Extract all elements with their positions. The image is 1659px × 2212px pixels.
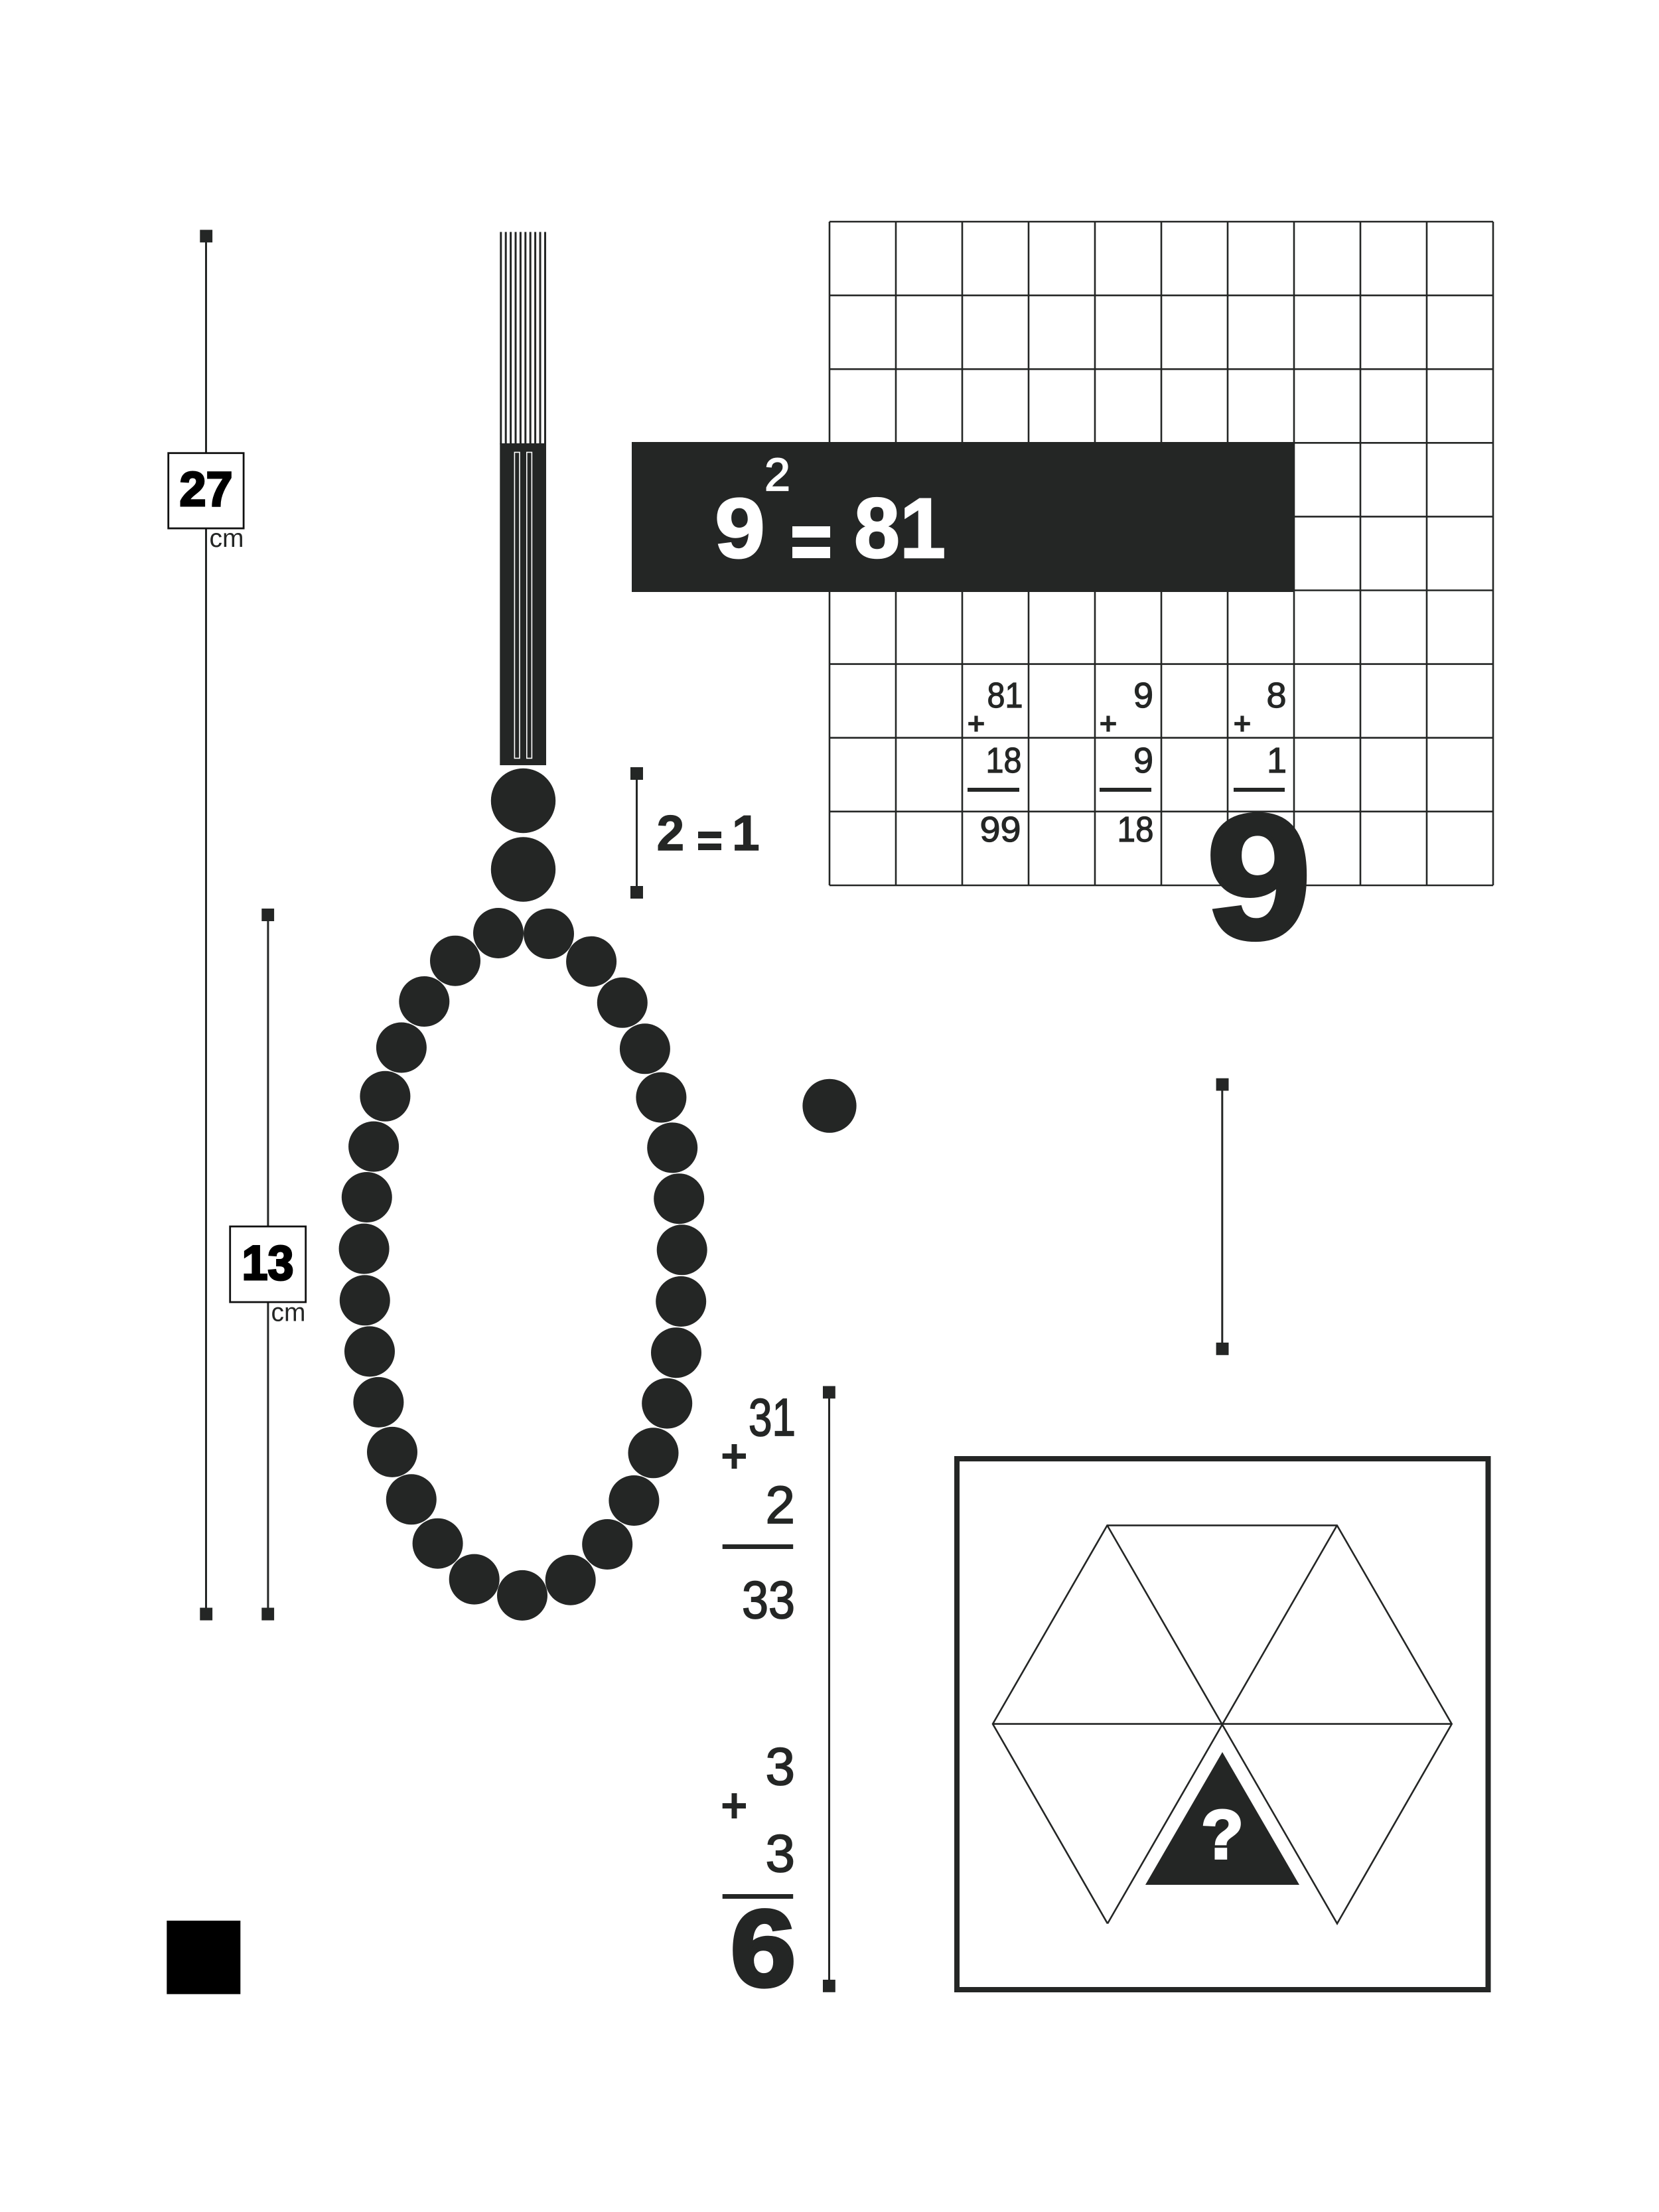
grid: [830, 222, 1493, 885]
sum: 31 + 2 = 33: 31: [749, 1388, 796, 1447]
sum: 9 + 9 = 18: [1099, 676, 1153, 849]
label box: 13: [230, 1226, 306, 1302]
tassel body: [500, 443, 546, 765]
label box: 27: [169, 453, 244, 528]
sum: 31 + 2 = 33: [723, 1388, 796, 1629]
large result: 6: 6: [731, 1887, 796, 2009]
sum: 8 + 1 = 9: +: [1233, 705, 1252, 741]
sum: 81 + 18 = 99: 81: [987, 676, 1023, 715]
sum: 81 + 18 = 99: 99: [979, 810, 1021, 849]
text: 2 = 1: [657, 805, 760, 861]
dark triangle with question mark: [1145, 1752, 1299, 1885]
sum: 81 + 18 = 99: +: [967, 705, 985, 741]
measure line: 13 cm: [230, 909, 306, 1621]
label box: 27: 27: [179, 463, 232, 516]
text: 2 = 1: 2: [657, 805, 684, 861]
equation banner: 9 squared = 81: [632, 442, 1294, 592]
framed hexagon puzzle: [957, 1459, 1488, 1990]
equation banner: 9 squared = 81: 81: [854, 481, 946, 576]
sum: 81 + 18 = 99: [967, 676, 1023, 849]
sum: 9 + 9 = 18: 9: [1133, 741, 1153, 780]
hexagon of triangles: [993, 1525, 1452, 1923]
sum: 8 + 1 = 9: [1206, 676, 1311, 976]
equation banner: 9 squared = 81: 2: [764, 449, 790, 500]
two large beads: [491, 769, 555, 902]
label box: 13: 13: [242, 1236, 293, 1290]
sum: 3 + 3 = 6: 3: [766, 1824, 795, 1883]
sum: 3 + 3 = 6: [723, 1737, 796, 2009]
sum: 31 + 2 = 33: 2: [766, 1475, 795, 1534]
prayer beads: [339, 232, 707, 1621]
loose single bead: [802, 1079, 857, 1133]
unit: cm: cm: [271, 1299, 305, 1327]
measure line: lower: [823, 1386, 835, 1992]
text: 2 = 1: 1: [732, 805, 760, 861]
measure line: 2 = 1: [630, 767, 760, 899]
large result: 9: 9: [1206, 778, 1311, 976]
sum: 9 + 9 = 18: 9: [1133, 676, 1153, 715]
tassel strands: [500, 232, 546, 445]
black square: [167, 1921, 240, 1994]
dark triangle with question mark: ?: [1201, 1797, 1244, 1874]
sum: 81 + 18 = 99: 18: [986, 741, 1022, 780]
sum: 8 + 1 = 9: 1: [1267, 741, 1287, 780]
sum: 8 + 1 = 9: 8: [1266, 676, 1286, 715]
sum: 3 + 3 = 6: 3: [766, 1737, 795, 1796]
measure line: 27 cm: [169, 230, 244, 1620]
equation banner: 9 squared = 81: 9: [715, 481, 765, 576]
measure line: right: [1216, 1078, 1229, 1355]
loop of 31 beads: [339, 908, 707, 1621]
sum: 9 + 9 = 18: +: [1099, 705, 1118, 741]
sum: 31 + 2 = 33: 33: [742, 1570, 795, 1629]
sum: 9 + 9 = 18: 18: [1118, 810, 1153, 849]
unit: cm: cm: [210, 524, 244, 553]
